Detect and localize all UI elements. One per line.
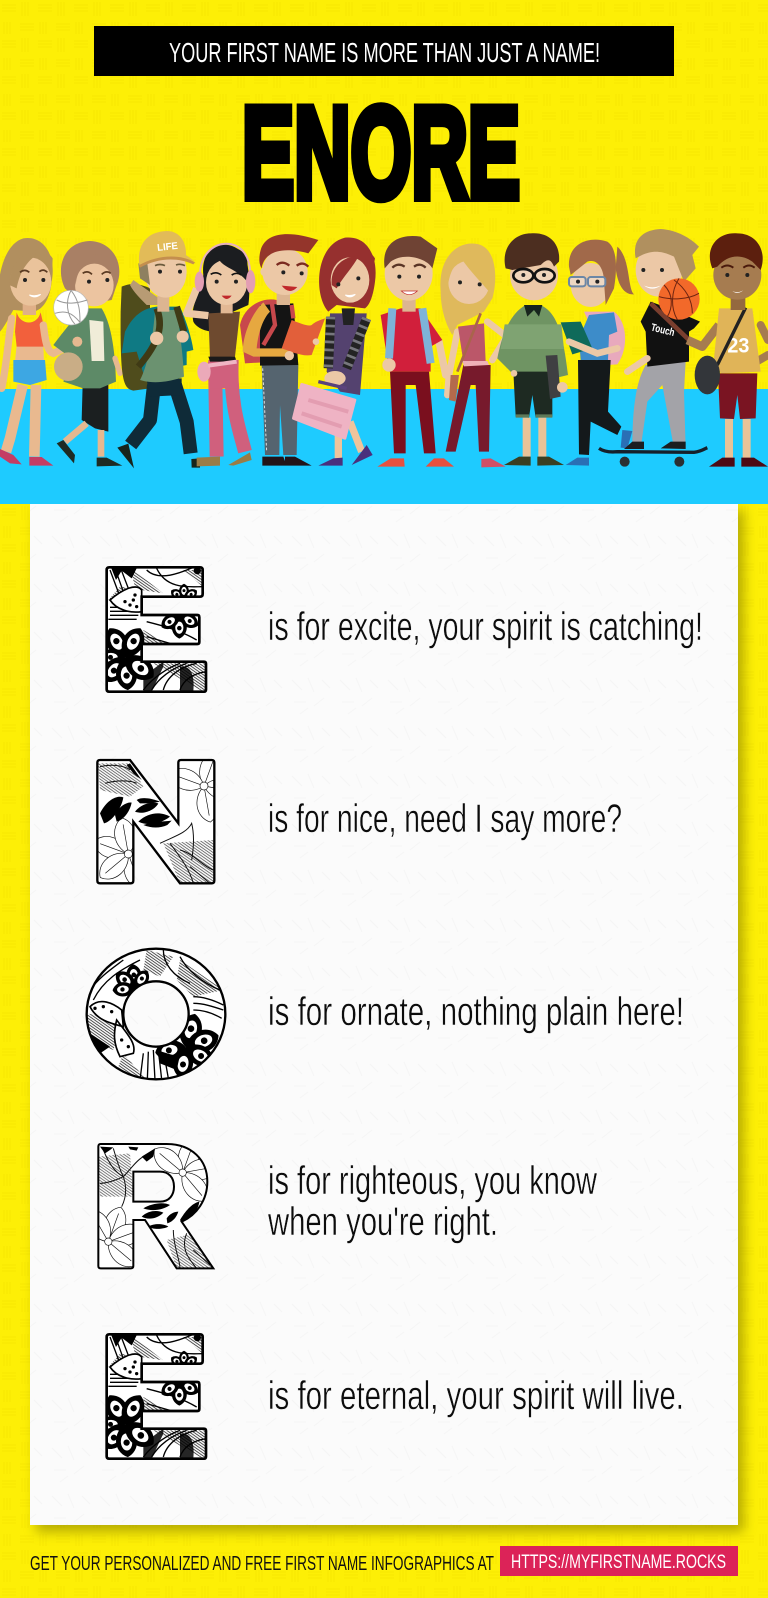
ornamental letter O xyxy=(87,949,225,1080)
illustration: group of twelve young people xyxy=(0,229,768,468)
person: girl with ponytail and tablet xyxy=(561,240,634,466)
row 1: letter E xyxy=(97,565,703,693)
person: boy on skateboard with basketball xyxy=(599,229,719,467)
cap label: LIFE xyxy=(157,241,179,254)
ornamental letter R xyxy=(97,1143,216,1270)
text for R: is for righteous, you know xyxy=(268,1159,597,1203)
panel shadow xyxy=(36,510,744,1532)
text for R xyxy=(267,1159,597,1244)
person: boy with glasses and green sweater xyxy=(497,233,568,466)
row 3: letter O xyxy=(87,949,684,1080)
footer link badge xyxy=(500,1546,738,1576)
person: boy with cap and backpack xyxy=(117,231,200,468)
person: girl with headphones xyxy=(187,244,255,466)
row 4: letter R xyxy=(97,1143,597,1270)
blue floor band xyxy=(0,389,768,504)
ornamental letter E repeat xyxy=(97,1332,206,1460)
text for N: is for nice, need I say more? xyxy=(268,797,622,841)
footer call to action: GET YOUR PERSONALIZED AND FREE FIRST NAME INFOGRAPHICS AT xyxy=(30,1552,494,1575)
person: blonde girl xyxy=(440,244,507,467)
person: girl in green jacket with volleyball xyxy=(53,241,122,466)
white content panel xyxy=(30,504,738,1525)
heading banner xyxy=(94,26,674,76)
person: boy in red shirt xyxy=(377,236,454,467)
shirt print: Touch xyxy=(650,322,676,339)
right six people xyxy=(377,229,768,467)
title: name: ENORE xyxy=(242,80,520,226)
jersey number: 23 xyxy=(727,333,749,357)
person: boy reading a book xyxy=(240,234,325,466)
text for R: when you're right. xyxy=(267,1200,498,1244)
blue band lower edge over shadow xyxy=(0,470,768,504)
left six people xyxy=(0,231,376,468)
ornamental letter E xyxy=(97,565,206,693)
ornamental letter N xyxy=(96,758,216,884)
person: girl in orange top xyxy=(0,238,78,466)
row 2: letter N xyxy=(96,758,621,884)
person: boy in yellow basketball jersey xyxy=(695,233,768,467)
person: girl with pink handbag xyxy=(293,237,376,466)
row 5: letter E xyxy=(97,1332,684,1460)
